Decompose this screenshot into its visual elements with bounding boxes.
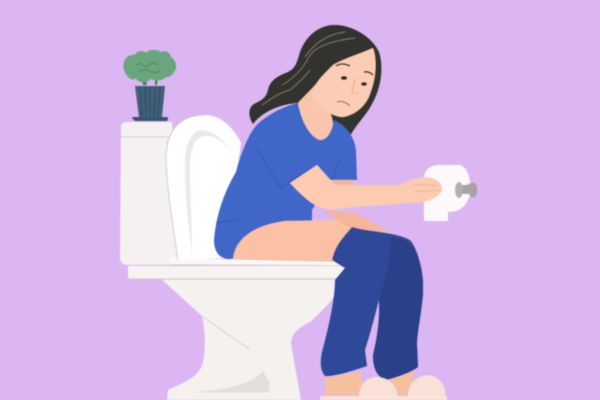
toilet bowl [160,278,342,400]
front arm and hand [290,165,442,210]
eyebrows, eyes, nose, mouth [336,64,373,106]
toilet [120,115,345,400]
face [312,48,376,117]
back arm [325,180,390,232]
toilet lid [166,115,241,260]
slippers [359,375,445,396]
icon: toilet paper roll on holder [424,165,478,221]
toilet rim [128,266,345,279]
hair [249,25,381,138]
icon: potted plant [123,50,176,121]
toilet tank [120,122,182,265]
thigh [233,220,372,262]
neck [298,80,334,140]
trousers [321,227,423,380]
woman [214,25,447,400]
shirt [214,103,357,259]
ankles [325,371,415,395]
